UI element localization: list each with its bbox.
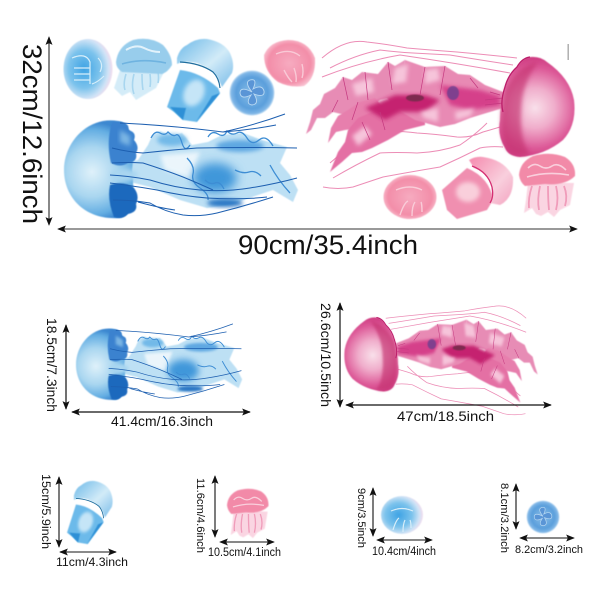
height label: 15cm/5.9inch bbox=[39, 474, 51, 549]
jellyfish: pink large bbox=[344, 306, 538, 415]
jellyfish: pink bell with tentacles bbox=[519, 154, 575, 217]
jellyfish: big blue bbox=[64, 114, 298, 218]
panel: blue large size bbox=[44, 318, 250, 429]
height label: 11.6cm/4.6inch bbox=[194, 478, 206, 553]
jellyfish: blue disc bbox=[230, 70, 274, 116]
height label: 9cm/3.5inch bbox=[355, 488, 367, 548]
width label: 11cm/4.3inch bbox=[56, 555, 128, 569]
jellyfish: pink tilted bbox=[442, 157, 513, 219]
jellyfish: small pink bbox=[227, 489, 269, 538]
panel: full sticker set bbox=[17, 37, 577, 260]
small vertical mark bbox=[568, 44, 569, 60]
jellyfish: small blue tilted bbox=[67, 481, 113, 544]
height arrow bbox=[372, 488, 374, 536]
height label: 8.1cm/3.2inch bbox=[498, 483, 510, 553]
height label: 26.6cm/10.5inch bbox=[318, 303, 334, 407]
jellyfish: blue bell with tentacles bbox=[114, 39, 172, 100]
width label: 8.2cm/3.2inch bbox=[515, 544, 583, 556]
width label: 90cm: 90cm/35.4inch bbox=[238, 230, 418, 260]
jellyfish: small pale blue bbox=[381, 496, 423, 534]
jellyfish: blue tilted bell bbox=[167, 39, 233, 122]
width arrow bbox=[220, 541, 274, 543]
height label: 32cm: 32cm/12.6inch bbox=[17, 44, 47, 224]
width arrow bbox=[60, 551, 116, 553]
width arrow bbox=[520, 537, 574, 539]
height arrow bbox=[65, 325, 67, 409]
panel: small blue disc size bbox=[498, 483, 583, 556]
height arrow bbox=[339, 303, 341, 407]
jellyfish: small blue disc bbox=[527, 501, 559, 533]
panel: pink large size bbox=[318, 303, 551, 424]
panel: small pink size bbox=[194, 476, 281, 559]
jellyfish: blue large bbox=[76, 324, 242, 400]
width label: 10.4cm/4inch bbox=[372, 546, 436, 558]
panel: small pale blue size bbox=[355, 488, 436, 558]
height arrow bbox=[58, 477, 60, 547]
height arrow bbox=[515, 484, 517, 529]
width arrow: 90cm bbox=[58, 228, 577, 230]
height arrow: 32cm bbox=[48, 37, 50, 225]
height arrow bbox=[214, 476, 216, 537]
jellyfish: pale blue round bbox=[64, 39, 112, 99]
panel: small blue tilted size bbox=[39, 474, 128, 569]
width label: 41.4cm/16.3inch bbox=[111, 413, 213, 429]
width arrow bbox=[346, 404, 551, 406]
width arrow bbox=[72, 411, 250, 413]
width label: 47cm/18.5inch bbox=[397, 408, 494, 424]
jellyfish: big pink bbox=[306, 41, 575, 189]
jellyfish: pink round lower bbox=[384, 175, 436, 219]
width arrow bbox=[377, 539, 432, 541]
width label: 10.5cm/4.1inch bbox=[208, 547, 281, 559]
jellyfish: pink round bbox=[264, 40, 315, 86]
height label: 18.5cm/7.3inch bbox=[44, 318, 60, 412]
